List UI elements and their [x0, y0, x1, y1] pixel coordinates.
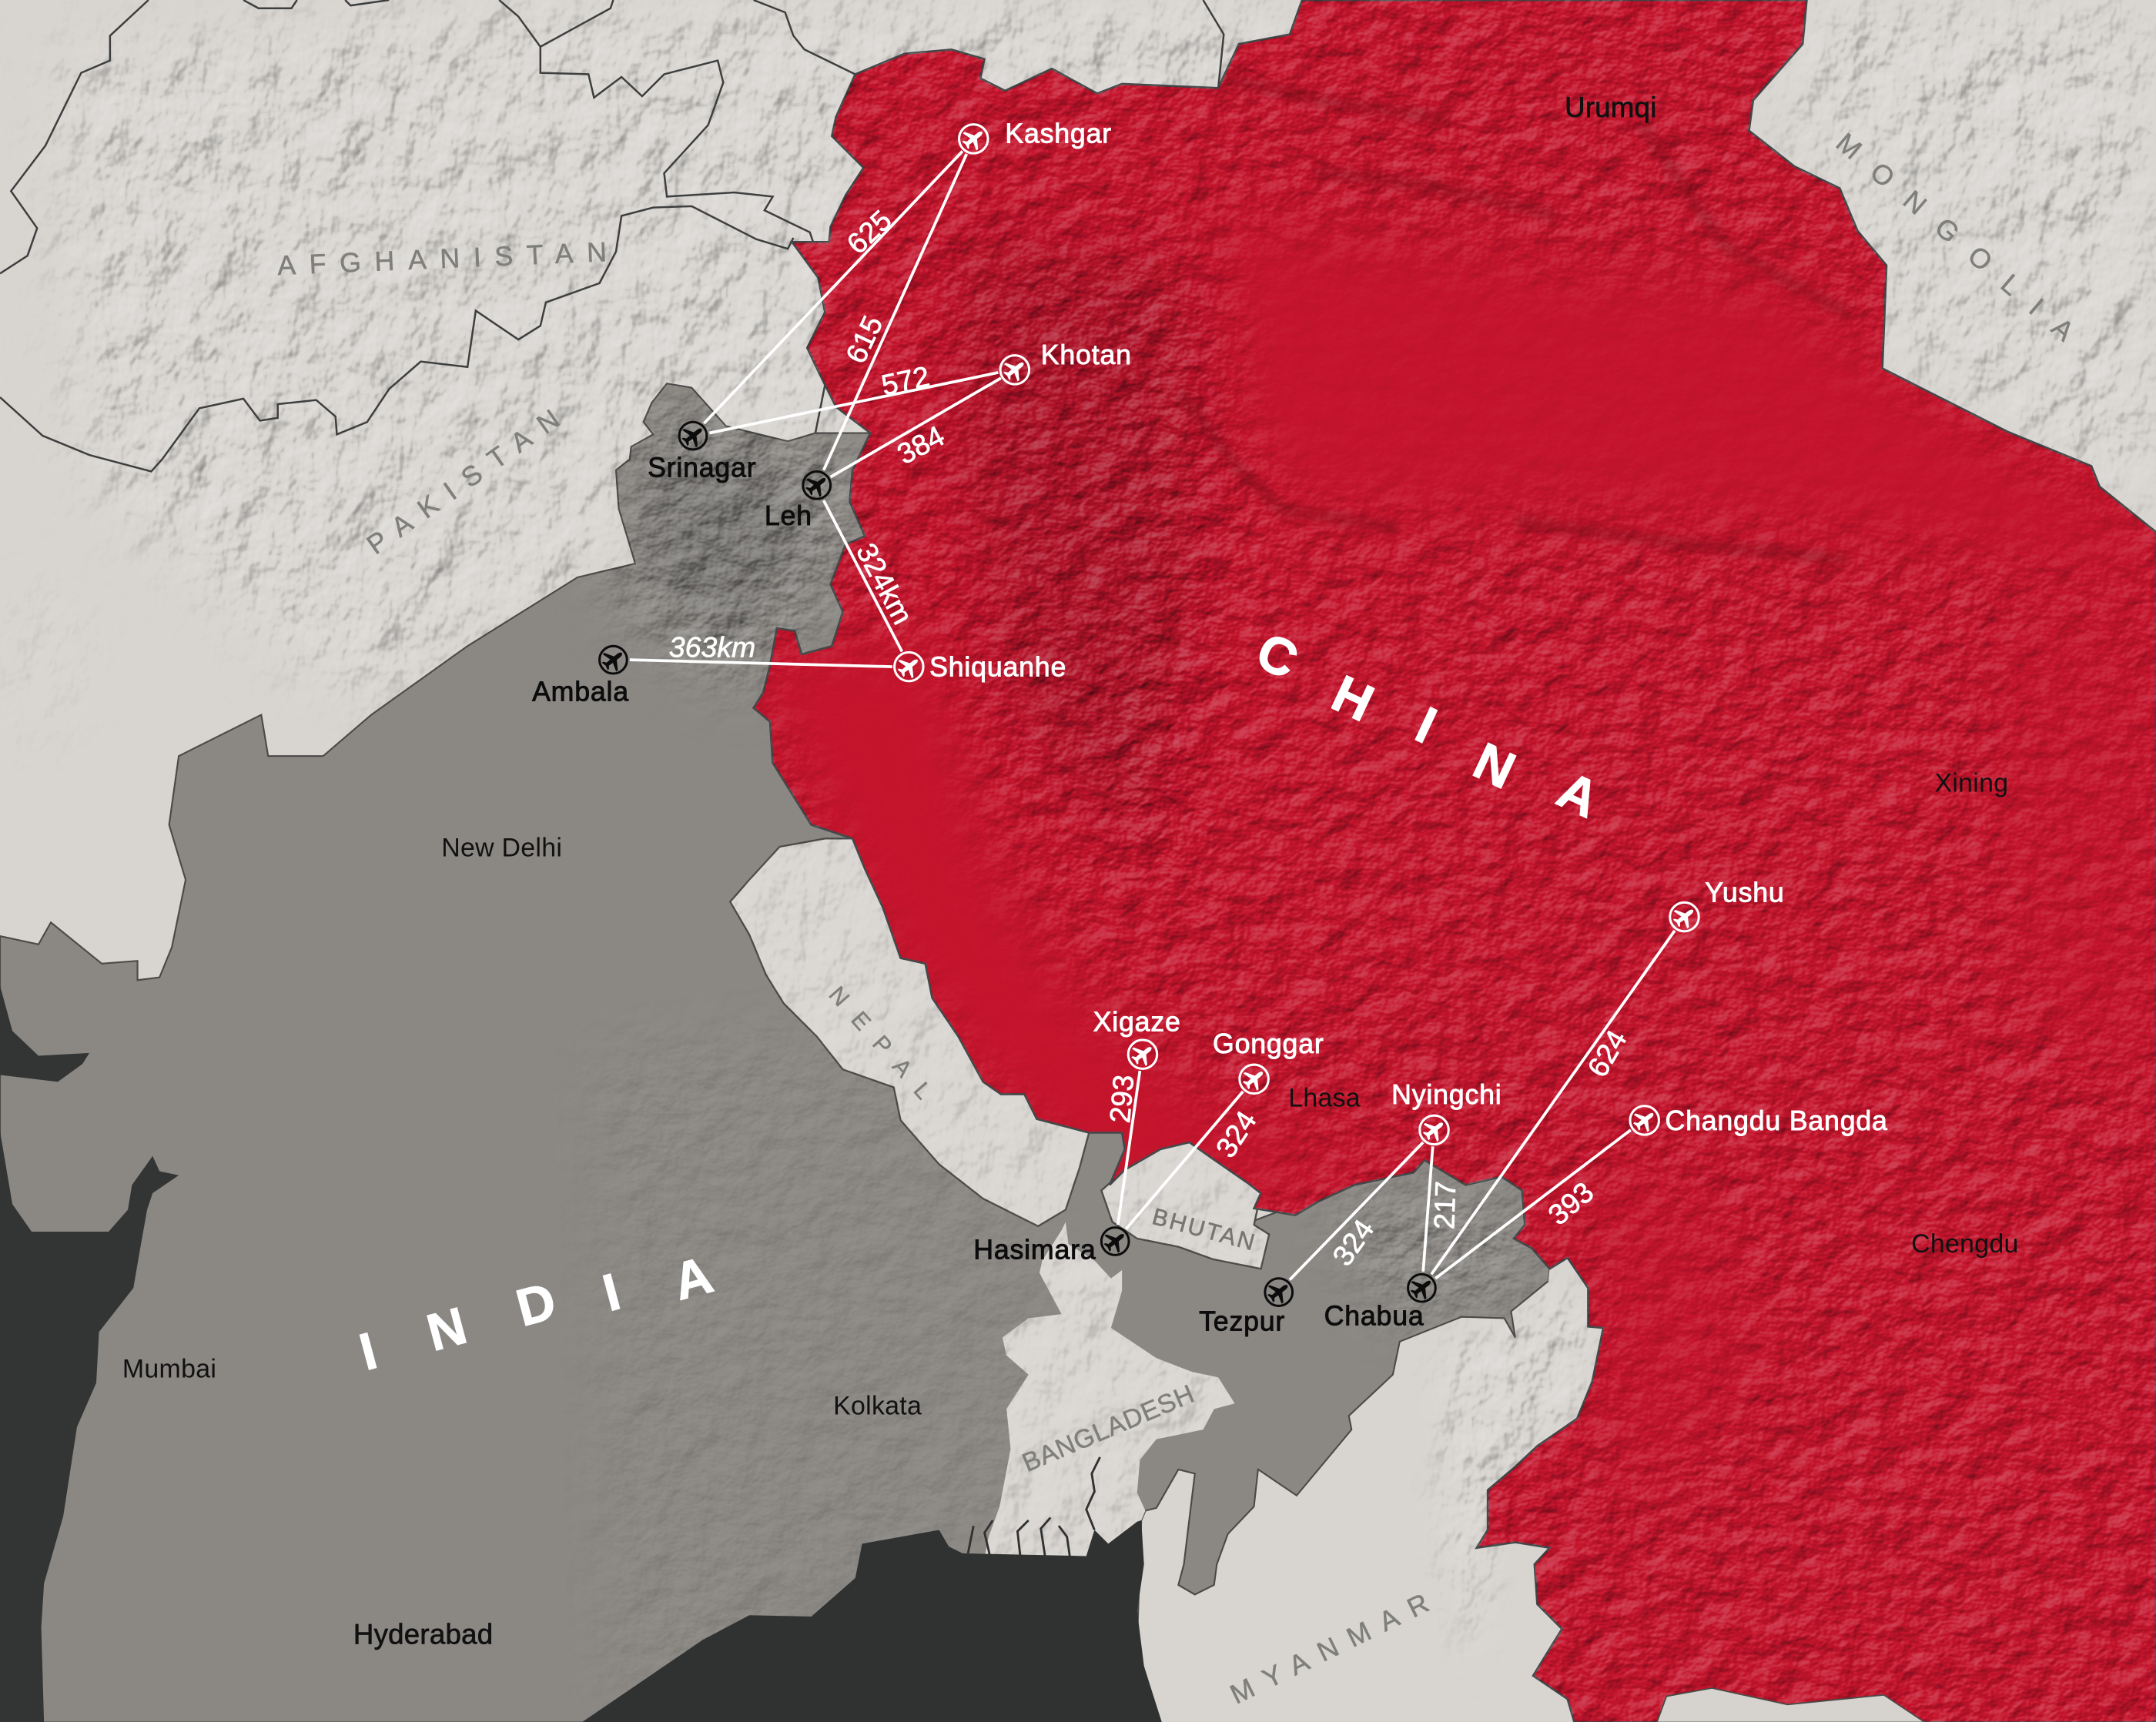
region: Bangladesh — [983, 1222, 1235, 1564]
route: Chabua to Nyingchi, 217: 217 — [1428, 1181, 1461, 1230]
route: Chabua to Yushu, 624: 624 — [1581, 1025, 1633, 1082]
route: Tezpur to Nyingchi, 324 — [1290, 1142, 1423, 1280]
country label: Bangladesh: BANGLADESH — [1018, 1379, 1199, 1478]
terrain shading: Kashmir — [646, 453, 812, 632]
route: Leh to Kashgar, 615: 615 — [839, 311, 889, 368]
airport: Ambala: Ambala — [532, 677, 629, 707]
city label: New Delhi: New Delhi — [441, 834, 562, 863]
sea: Gulf of Kutch — [0, 985, 89, 1082]
airport: Kashgar — [959, 119, 1112, 154]
airport: Nyingchi: Nyingchi — [1391, 1079, 1502, 1110]
airport: Xigaze — [1093, 1006, 1181, 1069]
route: Chabua to Changdu Bangda, 393: 393 — [1542, 1175, 1599, 1231]
route: Tezpur to Nyingchi, 324: 324 — [1326, 1213, 1380, 1272]
route: Chabua to Yushu, 624 — [1431, 931, 1675, 1274]
airport: Srinagar: Srinagar — [648, 453, 756, 483]
route: Hasimara to Xigaze, 293: 293 — [1103, 1073, 1140, 1124]
route: Srinagar to Khotan, 572 — [709, 359, 998, 433]
airport: Yushu — [1669, 877, 1785, 932]
airport: Khotan: Khotan — [1041, 339, 1132, 370]
city label: Hyderabad: Hyderabad — [353, 1619, 493, 1650]
region: Bhutan — [1101, 1142, 1269, 1269]
terrain shading: western Tibet — [962, 234, 1197, 852]
country label: Pakistan: PAKISTAN — [361, 396, 577, 560]
country label: India: INDIA — [353, 1246, 718, 1382]
sea: Bay of Bengal — [581, 1520, 1162, 1722]
airport: Shiquanhe: Shiquanhe — [929, 652, 1066, 683]
route: Hasimara to Xigaze, 293 — [1103, 1071, 1140, 1225]
terrain relief: India — [596, 385, 1549, 1653]
airport: Yushu: Yushu — [1705, 877, 1785, 908]
airport: Nyingchi — [1391, 1079, 1502, 1145]
route: Srinagar to Kashgar, 625: 625 — [840, 204, 898, 260]
route: Srinagar to Khotan, 572: 572 — [879, 359, 932, 401]
route: Leh to Khotan, 384 — [831, 378, 1001, 477]
terrain ridges: Tian Shan and Kunlun — [1181, 79, 1850, 560]
airport: Xigaze: Xigaze — [1093, 1006, 1181, 1037]
route: Hasimara to Gonggar, 324 — [1126, 1092, 1263, 1229]
region: China — [754, 0, 2156, 1722]
airport: Kashgar: Kashgar — [1005, 119, 1112, 149]
airport: Tezpur — [1199, 1277, 1294, 1337]
city label: Chengdu: Chengdu — [1911, 1229, 2019, 1259]
airport: Chabua — [1324, 1272, 1437, 1331]
route: Hasimara to Gonggar, 324: 324 — [1210, 1105, 1263, 1163]
airport: Changdu Bangda: Changdu Bangda — [1665, 1105, 1888, 1136]
country label: Bhutan: BHUTAN — [1150, 1204, 1259, 1256]
city label: Xining: Xining — [1934, 769, 2008, 798]
terrain relief: Afghanistan, Pakistan and Mongolia mountains — [9, 0, 2156, 710]
route: Leh to Shiquanhe, 324km: 324km — [850, 538, 919, 630]
airport: Srinagar — [648, 420, 756, 483]
airport: Leh — [765, 470, 832, 531]
city label: Mumbai: Mumbai — [122, 1354, 216, 1383]
route: Leh to Shiquanhe, 324km — [824, 500, 919, 651]
region: southern neighbour patch — [1657, 1688, 1925, 1722]
country label: Myanmar: MYANMAR — [1225, 1582, 1445, 1710]
terrain relief: Nepal, Bhutan and Bangladesh — [735, 839, 1266, 1555]
route: Chabua to Changdu Bangda, 393 — [1435, 1130, 1631, 1279]
city label: Lhasa: Lhasa — [1288, 1084, 1361, 1113]
international borders — [0, 0, 1224, 472]
route: Ambala to Shiquanhe, 363km: 363km — [669, 631, 755, 664]
route: Leh to Khotan, 384: 384 — [892, 420, 949, 470]
airport: Khotan — [999, 339, 1132, 385]
country label: China: CHINA — [1247, 622, 1608, 829]
country label: Afghanistan: AFGHANISTAN — [276, 236, 621, 281]
city label: Urumqi: Urumqi — [1565, 92, 1657, 123]
route: Chabua to Nyingchi, 217 — [1423, 1146, 1461, 1272]
region: Myanmar — [1195, 1258, 1603, 1722]
country label: Mongolia: MONGOLIA — [1830, 127, 2097, 361]
city label: Kolkata: Kolkata — [833, 1392, 922, 1421]
Myanmar and Bangladesh border — [1178, 1281, 1548, 1594]
airport: Chabua: Chabua — [1324, 1300, 1424, 1331]
route: Leh to Kashgar, 615 — [824, 154, 966, 470]
sea: Arabian Sea — [0, 1132, 179, 1722]
airport: Gonggar: Gonggar — [1213, 1028, 1324, 1059]
route: Srinagar to Kashgar, 625 — [704, 151, 962, 423]
route: Ambala to Shiquanhe, 363km — [630, 631, 892, 667]
delta channels — [968, 1457, 1100, 1556]
airport: Hasimara: Hasimara — [973, 1235, 1096, 1266]
airport: Tezpur: Tezpur — [1199, 1306, 1285, 1337]
region: Nepal — [730, 838, 1089, 1226]
airport: Hasimara — [973, 1225, 1130, 1266]
region: India — [0, 383, 1549, 1722]
country label: Nepal: NEPAL — [824, 982, 947, 1117]
airport: Gonggar — [1213, 1028, 1324, 1095]
airport: Leh: Leh — [765, 500, 812, 531]
airport: Ambala — [532, 644, 629, 707]
